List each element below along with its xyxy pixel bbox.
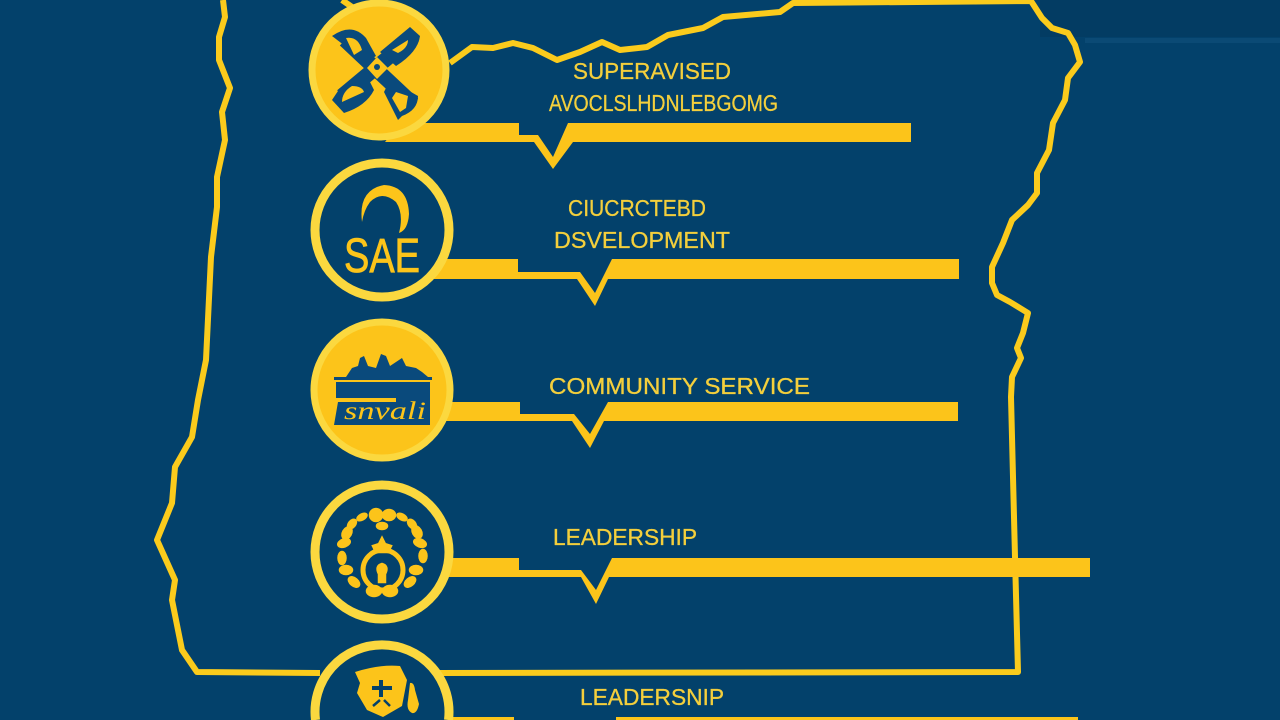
icon: shield badge [315,645,449,720]
row 4: leadership [315,485,1090,619]
icon: wreath crest [315,485,449,619]
state outline map [157,0,1080,673]
connector bar 4 [445,558,1090,604]
label: leadership repeat: LEADERSNIP [580,684,724,710]
connector bar 5 [450,717,1078,720]
row 1: supervised [312,3,911,169]
icon: SAE emblem: SAE [344,230,420,283]
row 5: leadership repeat [315,645,1078,720]
icon: community building: snvali [344,398,426,425]
label: development: DSVELOPMENT [554,227,730,253]
label: supervised: SUPERAVISED [573,58,731,84]
label: leadership: LEADERSHIP [553,524,697,550]
connector bar 2 [430,259,959,306]
label: curated: CIUCRCTEBD [568,195,706,221]
icon: SAE emblem [315,163,449,297]
row 3: community service [314,322,958,458]
connector bar 1 [385,123,911,169]
row 2: curated development [315,163,959,306]
icon: community building [314,322,450,458]
label: garbled second line: AVOCLSLHDNLEBGOMG [549,90,778,116]
label: community service: COMMUNITY SERVICE [549,373,810,399]
icon: crossed tools [312,3,446,137]
connector bar 3 [445,402,958,448]
